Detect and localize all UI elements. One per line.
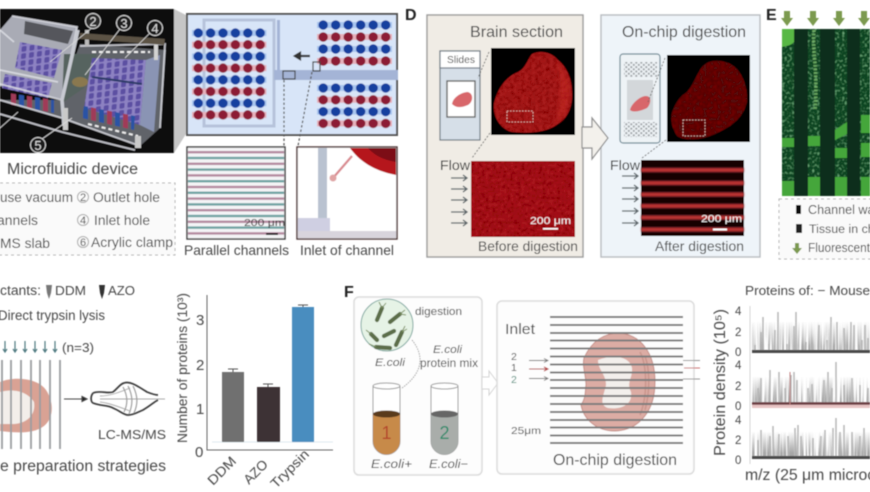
- y tick labels: [195, 312, 204, 461]
- callout: number 3: 3: [120, 16, 128, 31]
- spectrum: bottom: [752, 418, 870, 458]
- panel: parallel channels micrograph: [187, 147, 285, 239]
- right chamber: [62, 54, 97, 103]
- label: inlet: Inlet: [505, 322, 535, 338]
- legend: device parts: MS slab: [0, 236, 50, 251]
- panel: E. coli sample preparation: [354, 297, 482, 475]
- y axis title: Protein density (10⁵): [712, 309, 729, 456]
- caption: on-chip digestion: On-chip digestion: [553, 452, 677, 469]
- image: fluorescence micrograph: [782, 29, 870, 196]
- icon: DDM tube: [46, 285, 52, 299]
- panel: chip schematic with channel arrays: [187, 14, 398, 135]
- heading: microfluidic device: Microfluidic device: [7, 161, 138, 178]
- panel label F: F: [344, 284, 354, 301]
- parallel channels: [550, 317, 683, 443]
- spectrum: middle: [752, 362, 870, 406]
- caption: sample preparation strategies: e preparation strategies: [0, 458, 166, 475]
- label: E. coli protein mix: [420, 344, 478, 370]
- left chamber: [0, 16, 77, 100]
- callout: number 2: 2: [89, 14, 97, 29]
- heading: brain section: Brain section: [470, 24, 563, 41]
- icon: glass slide: [440, 51, 480, 140]
- y tick labels: 4: [735, 306, 742, 318]
- legend: device parts: [0, 183, 175, 255]
- y tick labels: 0: [735, 455, 741, 467]
- icon: tube 1: [373, 383, 400, 455]
- arrow: flow direction: [295, 53, 310, 59]
- caption: after digestion: After digestion: [655, 238, 744, 254]
- y tick labels: 4: [735, 415, 742, 427]
- callout: number 2: [86, 14, 100, 29]
- device zoom connector: [174, 9, 186, 153]
- x tick labels: [205, 447, 312, 491]
- glass frame highlights: [0, 16, 165, 150]
- label: E. coli minus: E.coli−: [429, 457, 468, 471]
- y tick labels: 0: [735, 401, 741, 413]
- bar: AZO: [257, 384, 280, 442]
- legend: device parts: 2: [80, 192, 86, 204]
- panel label D: D: [405, 7, 417, 24]
- image: whole brain section after digestion: [667, 55, 750, 142]
- y tick labels: [735, 306, 742, 467]
- x tick labels: Trypsin: [268, 447, 312, 491]
- caption: parallel channels: Parallel channels: [184, 242, 289, 258]
- y tick labels: 2: [735, 435, 741, 447]
- y axis title: Number of proteins (10³): [175, 293, 190, 443]
- label: flow: Flow: [610, 157, 641, 173]
- label: E. coli protein mix: protein mix: [420, 357, 478, 370]
- image: tissue after digestion striped: 200 μm: [701, 213, 742, 225]
- caption: before digestion: Before digestion: [478, 238, 578, 254]
- y tick labels: 3: [196, 312, 204, 329]
- y tick labels: 4: [735, 360, 742, 372]
- label: E. coli: E.coli: [375, 357, 406, 369]
- callout: number 3: [116, 16, 132, 31]
- legend: device parts: use vacuum: [0, 190, 73, 205]
- y tick labels: 2: [196, 357, 204, 374]
- icon: tissue section: [581, 333, 655, 431]
- arrows: outlet flow: [683, 360, 700, 379]
- legend: device parts: Inlet hole: [94, 213, 150, 228]
- y tick labels: 2: [735, 381, 741, 393]
- label: LC-MS/MS: LC-MS/MS: [98, 427, 166, 442]
- bar chart: number of proteins: [175, 293, 333, 491]
- callout: number 5: [30, 138, 46, 153]
- arrows: flow direction: [451, 175, 467, 226]
- legend: device parts: 4: [80, 215, 86, 227]
- legend: fluorescence key: [779, 199, 870, 259]
- icon: LC-MS/MS ion funnel: [91, 382, 165, 415]
- arrows: fluorescent flow: [781, 11, 870, 26]
- y tick labels: 1: [196, 401, 204, 418]
- x tick labels: DDM: [205, 453, 239, 488]
- label: 25 micron: 25μm: [511, 425, 541, 437]
- label: E. coli plus: E.coli+: [371, 457, 412, 471]
- arrow: hollow arrow between panels: [582, 118, 608, 159]
- callout: number 4: [148, 20, 162, 36]
- panel: inlet of channel micrograph: [297, 147, 397, 239]
- icon: tube 2: 2: [439, 423, 450, 443]
- heading: on-chip digestion: On-chip digestion: [622, 24, 746, 41]
- legend: device parts: 6: [80, 237, 86, 249]
- diagram: tissue on parallel channels: [0, 360, 60, 449]
- base plate: [0, 44, 166, 146]
- label: E. coli protein mix: E.coli: [433, 344, 463, 356]
- icon: AZO tube: [99, 285, 105, 299]
- panel: on-chip digestion: [601, 15, 760, 257]
- legend: surfactants: AZO: [108, 283, 135, 298]
- image: tissue before digestion: 200 μm: [530, 215, 571, 227]
- panel: microfluidic device photo: [0, 9, 174, 153]
- labels: inlet numbers: 2: [511, 374, 517, 386]
- panel: on-chip digestion channels: [497, 301, 694, 474]
- image: tissue after digestion striped: [641, 160, 744, 236]
- label: n equals 3: (n=3): [62, 341, 94, 355]
- heading: proteins of mouse: Proteins of: − Mouse: [745, 283, 870, 298]
- labels: inlet numbers: [511, 351, 517, 386]
- spectrum: top: [752, 312, 870, 352]
- x tick labels: AZO: [241, 457, 271, 487]
- text: direct trypsin lysis: Direct trypsin lysis: [0, 308, 105, 323]
- image: tissue before digestion: [471, 161, 575, 237]
- panel label E: E: [766, 7, 777, 24]
- arrows: inlet flow: [529, 358, 548, 380]
- legend: surfactants: ctants:: [0, 283, 41, 298]
- y tick labels: 0: [735, 347, 741, 359]
- arrows: flow direction: [622, 173, 638, 226]
- labels: inlet numbers: 2: [511, 351, 517, 363]
- labels: inlet numbers: 1: [511, 362, 517, 374]
- image: whole brain section before digestion: [491, 48, 575, 135]
- icon: tube 1: 1: [381, 423, 392, 443]
- bar: Trypsin: [292, 305, 314, 442]
- panel: brain section: [427, 15, 583, 257]
- arrows: sample loading: [3, 341, 57, 352]
- icon: tube 2: [431, 383, 458, 455]
- label: digestion: digestion: [415, 306, 462, 318]
- chart: protein density spectra: [712, 306, 870, 467]
- caption: inlet of channel: Inlet of channel: [300, 242, 394, 258]
- callout: number 5: 5: [34, 138, 42, 153]
- icon: glass slide: Slides: [447, 55, 475, 66]
- legend: device parts: Acrylic clamp: [91, 235, 173, 250]
- legend: surfactants: DDM: [55, 283, 86, 298]
- arrow: to mass spectrometry: [64, 396, 87, 402]
- bar: DDM: [222, 369, 244, 442]
- legend: surfactants: [0, 283, 135, 299]
- icon: chip with tissue: [620, 54, 660, 143]
- legend: device parts: Outlet hole: [93, 190, 160, 205]
- scale label: 200 um: 200 μm: [244, 217, 285, 229]
- arrow: hollow arrow to chip: [482, 371, 498, 395]
- y tick labels: 0: [195, 444, 203, 461]
- y tick labels: 2: [735, 327, 741, 339]
- label: flow: Flow: [440, 157, 471, 173]
- icon: E. coli circle: [361, 299, 413, 351]
- callout: number 4: 4: [151, 21, 159, 36]
